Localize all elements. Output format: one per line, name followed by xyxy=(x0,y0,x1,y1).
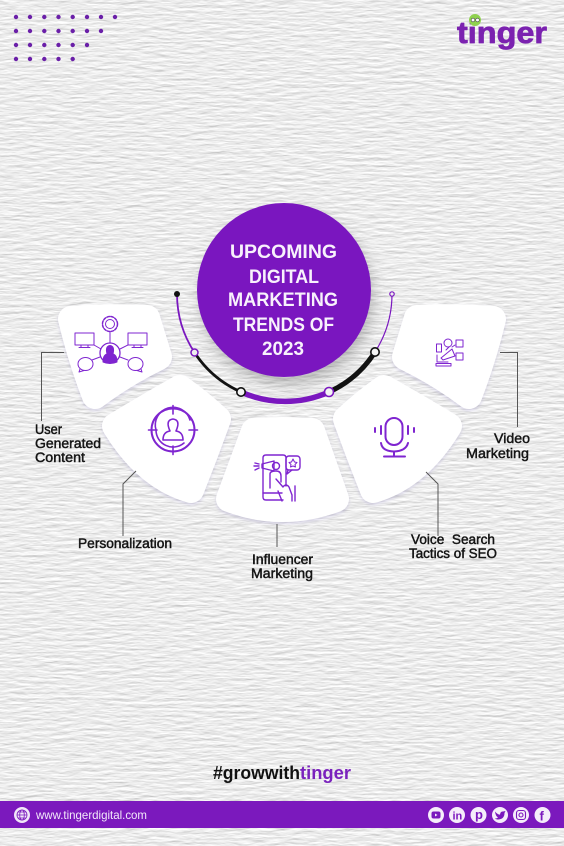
title text: DIGITAL xyxy=(249,267,319,288)
title text: UPCOMING xyxy=(230,242,337,263)
icon: influencer phone xyxy=(254,455,300,501)
social icons: f xyxy=(540,808,544,824)
label: video marketing xyxy=(466,431,530,461)
panel: voice search card xyxy=(346,388,449,490)
hashtag: #growwith xyxy=(213,763,300,783)
title text: TRENDS OF xyxy=(233,315,334,336)
leader line: influencer marketing xyxy=(276,524,278,547)
label: voice search tactics of seo xyxy=(409,532,497,561)
title text xyxy=(228,242,338,360)
panel: personalization card xyxy=(115,388,218,490)
social icons xyxy=(428,807,550,824)
leader line: voice search xyxy=(426,472,438,536)
label: user generated content xyxy=(35,422,101,465)
label: user generated content: Generated xyxy=(35,436,101,451)
title text: MARKETING xyxy=(228,290,338,311)
label: personalization: Personalization xyxy=(78,536,172,551)
logo: tinger: tinger xyxy=(457,15,547,50)
icon: user network xyxy=(75,316,147,372)
label: video marketing: Video xyxy=(494,431,530,446)
icon: globe xyxy=(14,807,30,823)
label: video marketing: Marketing xyxy=(466,446,529,461)
leader line: personalization xyxy=(123,471,136,536)
social icons: p xyxy=(475,807,483,822)
panel: video marketing card xyxy=(405,317,493,396)
timeline arc with nodes xyxy=(174,291,394,401)
panel: user generated content card xyxy=(71,316,159,396)
footer bar xyxy=(0,801,564,828)
icon: video megaphone xyxy=(436,339,463,366)
central circle with title xyxy=(197,203,371,377)
label: influencer marketing: Influencer xyxy=(252,552,314,567)
label: voice search tactics of seo: Tactics of SEO xyxy=(409,546,497,561)
label: voice search tactics of seo: Voice Search xyxy=(411,532,495,547)
hashtag xyxy=(213,763,351,783)
icon: microphone xyxy=(375,418,414,456)
panel: influencer marketing card xyxy=(229,430,336,509)
leader line: video marketing xyxy=(500,352,518,427)
leader line: user generated content xyxy=(42,352,64,421)
icon: target on person xyxy=(148,406,198,454)
label: user generated content: User xyxy=(35,422,62,437)
website url: www.tingerdigital.com xyxy=(35,808,147,822)
label: user generated content: Content xyxy=(35,450,85,465)
title text: 2023 xyxy=(262,339,304,360)
social icons: in xyxy=(452,810,463,822)
label: influencer marketing xyxy=(251,552,314,581)
label: influencer marketing: Marketing xyxy=(251,566,313,581)
hashtag: tinger xyxy=(300,763,351,783)
decorative dot grid xyxy=(14,15,117,61)
